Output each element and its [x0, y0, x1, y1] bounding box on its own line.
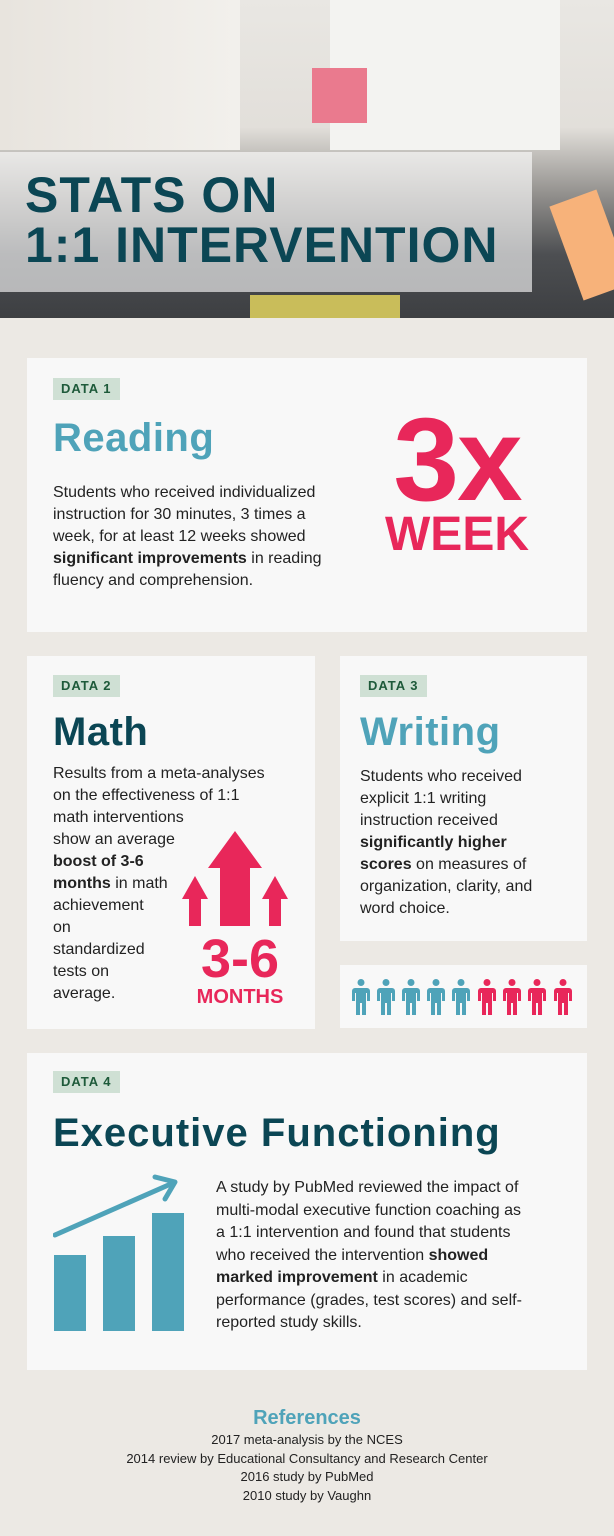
panel: people icons: [340, 965, 587, 1028]
stat 3-6 months: 3-6: [201, 929, 279, 989]
references: 2010 study by Vaughn: [243, 1488, 371, 1502]
badge: DATA 4: [61, 1074, 112, 1089]
references: 2016 study by PubMed: [240, 1469, 373, 1484]
stat 3x week: WEEK: [385, 508, 529, 561]
heading: Reading: [53, 416, 214, 460]
panel: data 1 reading: [27, 358, 587, 632]
text: a 1:1 intervention and found that students: [216, 1224, 510, 1241]
panel: data 3 writing: [340, 656, 587, 941]
stat 3x week: 3x: [393, 394, 521, 526]
text: instruction received: [360, 812, 498, 829]
references: [126, 1407, 488, 1502]
badge: DATA 3: [368, 678, 419, 693]
text: on: [53, 919, 71, 936]
text: organization, clarity, and: [360, 878, 532, 895]
text: performance (grades, test scores) and self-: [216, 1292, 522, 1308]
text: standardized: [53, 941, 145, 958]
panel: data 2 math: [27, 656, 315, 1029]
badge: [53, 378, 120, 400]
text: [53, 484, 322, 589]
text: math interventions: [53, 809, 184, 826]
title: STATS ON: [25, 167, 278, 223]
text: fluency and comprehension.: [53, 572, 253, 589]
badge: DATA 2: [61, 678, 112, 693]
text: tests on: [53, 963, 109, 980]
text: show an average: [53, 831, 175, 848]
badge: [360, 675, 427, 697]
text: week, for at least 12 weeks showed: [53, 528, 306, 545]
heading: Writing: [360, 710, 501, 754]
text: on the effectiveness of 1:1: [53, 787, 240, 804]
header photo: [0, 0, 614, 318]
text: [216, 1179, 522, 1331]
heading: Math: [53, 710, 148, 754]
text: achievement: [53, 897, 144, 914]
stat 3-6 months: MONTHS: [197, 986, 283, 1008]
text: reported study skills.: [216, 1314, 362, 1331]
badge: [53, 1071, 120, 1093]
text: multi-modal executive function coaching as: [216, 1202, 521, 1218]
text: boost of 3-6: [53, 853, 144, 870]
text: Students who received: [360, 768, 522, 785]
text: word choice.: [360, 900, 450, 917]
references: References: [253, 1407, 361, 1429]
chart: growth bars: [53, 1174, 184, 1331]
title: 1:1 INTERVENTION: [25, 217, 498, 273]
text: significantly higher: [360, 834, 507, 851]
text: months in math: [53, 875, 168, 892]
title band: [0, 152, 532, 292]
text: Students who received individualized: [53, 484, 315, 501]
text: average.: [53, 985, 115, 1002]
text: who received the intervention showed: [216, 1246, 488, 1264]
text: scores on measures of: [360, 856, 526, 873]
stat 3-6 months: [197, 929, 283, 1008]
badge: [53, 675, 120, 697]
text: Results from a meta-analyses: [53, 765, 265, 782]
references: 2014 review by Educational Consultancy and Research Center: [126, 1450, 488, 1466]
heading: Executive Functioning: [53, 1111, 501, 1155]
stat 3x week: [385, 394, 529, 561]
references: 2017 meta-analysis by the NCES: [211, 1432, 403, 1447]
text: significant improvements in reading: [53, 550, 322, 567]
text: [360, 768, 532, 917]
title: [25, 167, 498, 273]
text: marked improvement in academic: [216, 1269, 468, 1286]
text: [53, 765, 265, 1002]
badge: DATA 1: [61, 381, 112, 396]
icon: arrows: [182, 831, 288, 926]
panel: data 4 executive functioning: [27, 1053, 587, 1370]
text: instruction for 30 minutes, 3 times a: [53, 506, 306, 523]
text: A study by PubMed reviewed the impact of: [216, 1179, 518, 1196]
text: explicit 1:1 writing: [360, 790, 486, 807]
